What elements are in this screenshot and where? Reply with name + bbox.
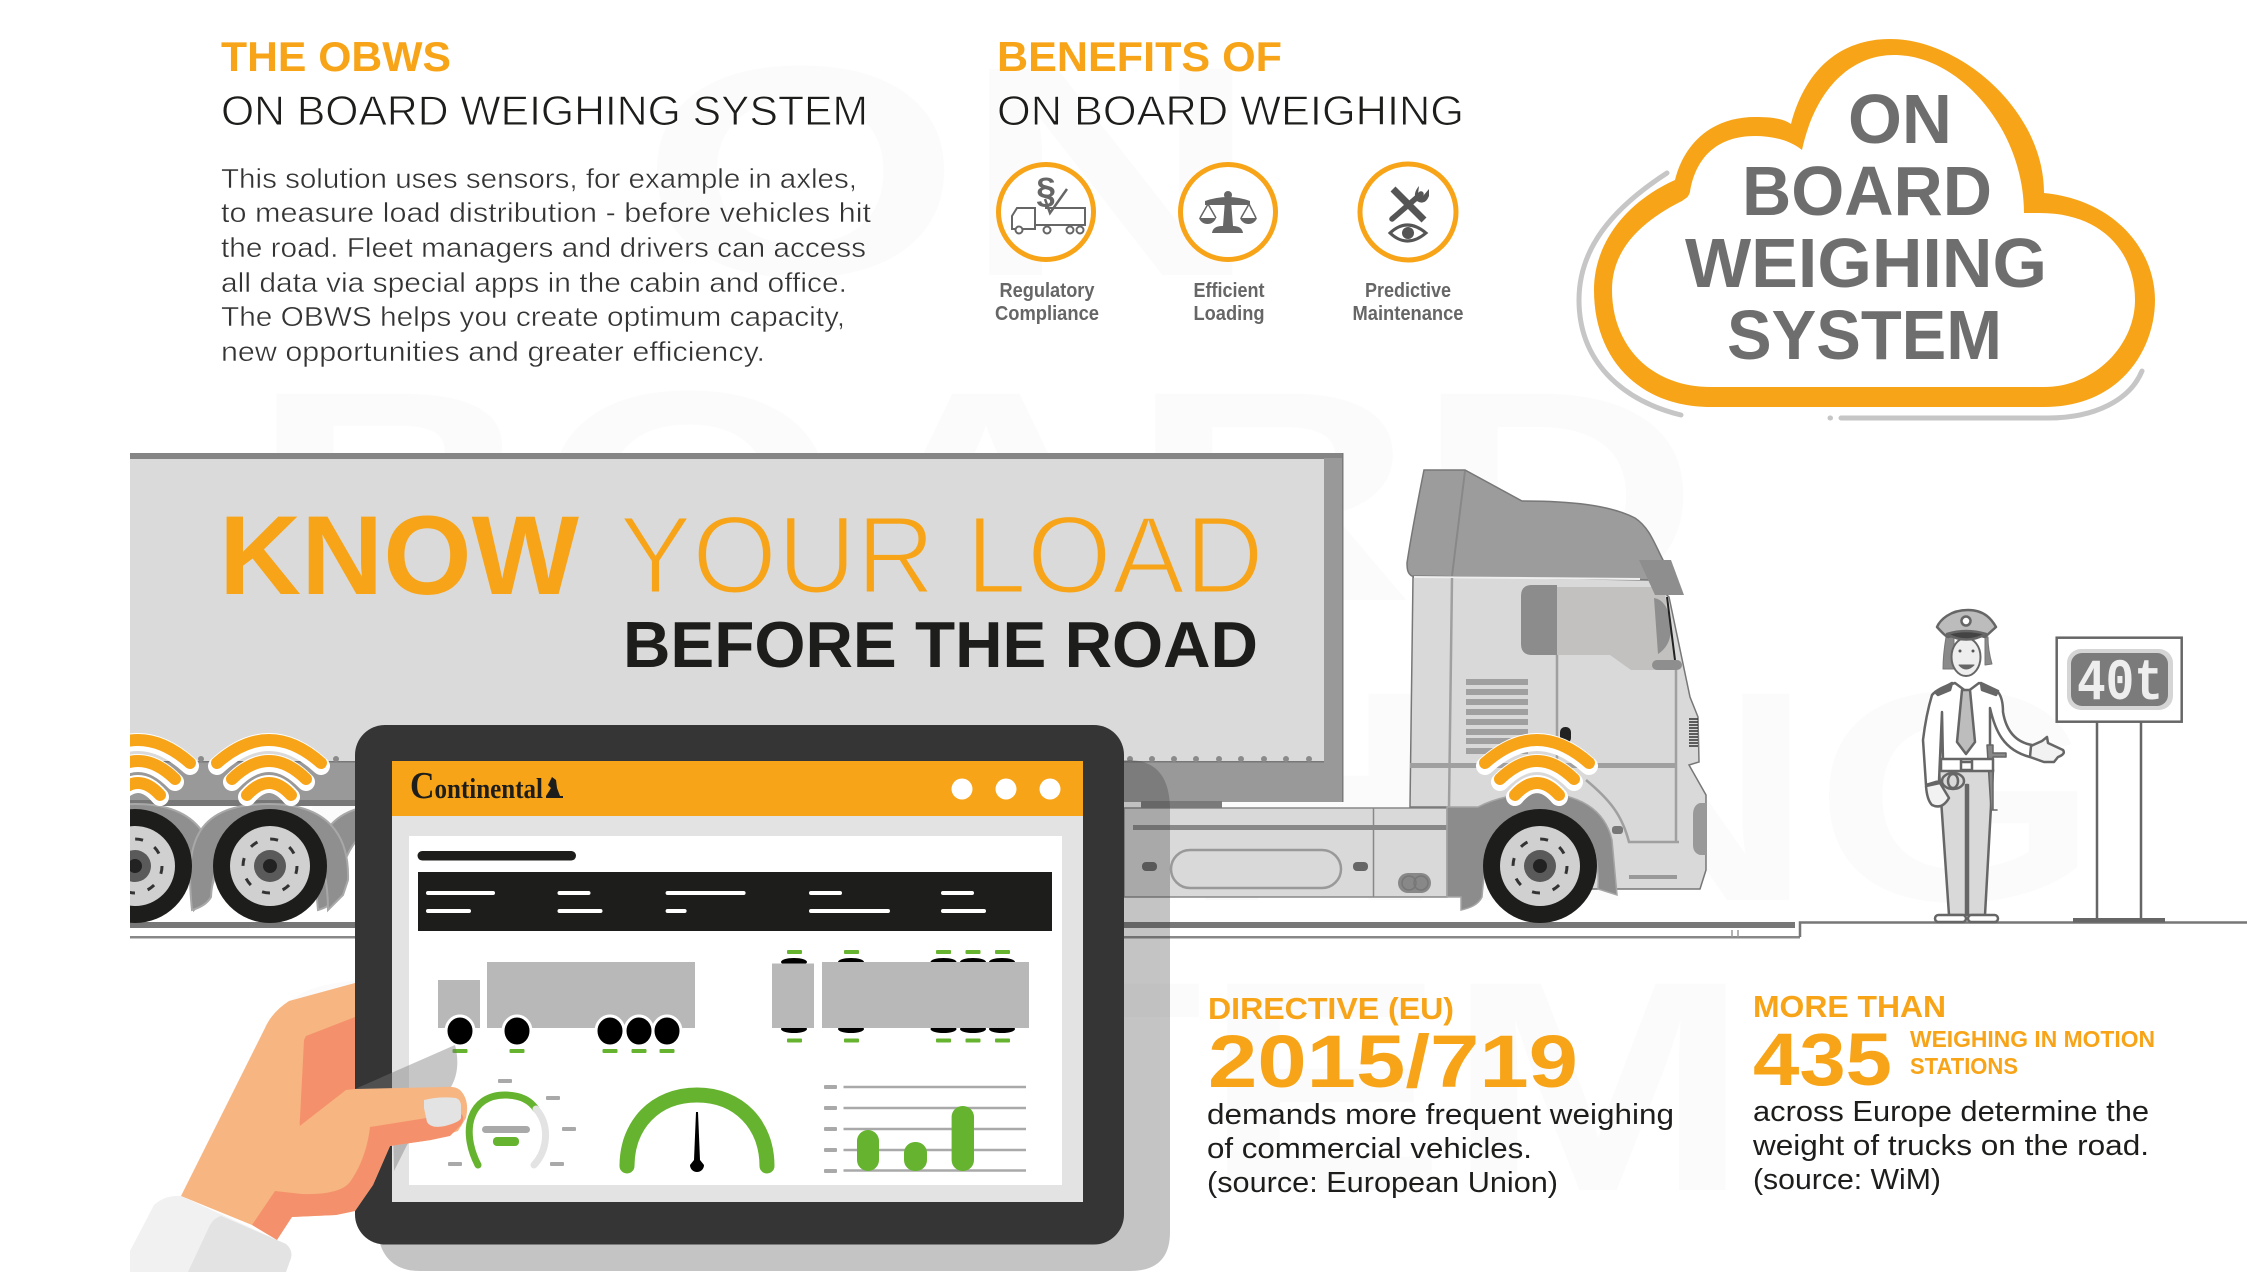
cloud shadow strokes [1579, 173, 2142, 418]
cloud text: ON [1848, 80, 1952, 158]
trailer underframe bar [130, 800, 360, 806]
body paragraph: to measure load distribution - before vehicles hit [221, 197, 871, 228]
truck cab [1124, 470, 1706, 923]
subheading: on board weighing system: ON BOARD WEIGHING SYSTEM [221, 87, 868, 134]
data table [418, 872, 1052, 931]
front wheel [1483, 809, 1597, 923]
dashboard title bar [418, 851, 576, 860]
thumb nail [424, 1097, 461, 1127]
body paragraph [221, 163, 871, 367]
shoes [1935, 915, 1998, 922]
tablet shadow [377, 760, 1170, 1271]
description: across Europe determine the [1753, 1096, 2149, 1128]
label: predictive maintenance [1352, 280, 1464, 325]
label: directive EU: DIRECTIVE (EU) [1208, 991, 1454, 1026]
subheading: on board weighing: ON BOARD WEIGHING [997, 87, 1464, 134]
label: weighing in motion stations: WEIGHING IN MOTION [1910, 1026, 2155, 1052]
cloud text: WEIGHING [1685, 224, 2047, 302]
screen reflection [355, 1045, 457, 1171]
mirrors [1639, 560, 1684, 670]
text block: the OBWS [221, 33, 871, 367]
label: more than: MORE THAN [1753, 989, 1946, 1024]
tablet [355, 725, 1124, 1244]
bar chart [824, 1085, 1026, 1173]
body paragraph: new opportunities and greater efficiency. [221, 336, 765, 367]
cab panel lines [1449, 578, 1679, 842]
sign pole [2073, 722, 2165, 922]
heading: the OBWS: THE OBWS [221, 33, 451, 80]
number: 435: 435 [1753, 1018, 1892, 1101]
text block: weighing stations [1752, 989, 2155, 1196]
police officer [1923, 610, 2064, 922]
dashboard panel [409, 836, 1062, 1185]
door handle [1560, 727, 1571, 743]
label: predictive maintenance: Predictive [1365, 280, 1451, 302]
label: weighing in motion stations: STATIONS [1910, 1053, 2018, 1079]
tablet screen [392, 761, 1083, 1202]
description: (source: European Union) [1207, 1167, 1558, 1199]
palm [181, 983, 467, 1225]
continental logo: Continental [410, 765, 543, 807]
trailer curtain studs [198, 756, 1312, 762]
heading: benefits of: BENEFITS OF [997, 33, 1282, 80]
description: (source: WiM) [1753, 1164, 1941, 1196]
pointing hand [2030, 737, 2064, 762]
label: predictive maintenance: Maintenance [1352, 303, 1464, 325]
cloud badge [1579, 39, 2155, 418]
sign panel [2057, 638, 2182, 722]
text block: directive [1207, 991, 1674, 1199]
road [130, 922, 2247, 938]
large gauge [627, 1095, 767, 1172]
hand holding tablet [130, 983, 467, 1272]
panel: benefits of on board weighing [995, 33, 1464, 325]
cloud text: SYSTEM [1727, 296, 2002, 374]
headline: before the road: BEFORE THE ROAD [623, 608, 1258, 681]
label: efficient loading: Efficient [1194, 280, 1265, 302]
face [1952, 638, 1980, 676]
truck trailer [130, 453, 1344, 806]
icon: regulatory compliance [998, 164, 1094, 260]
cloud outline [1594, 39, 2155, 407]
label: regulatory compliance: Regulatory [1000, 280, 1095, 302]
front wheel sensor waves [1485, 740, 1589, 797]
belt loops [1942, 773, 1964, 789]
trailer box [130, 453, 1343, 802]
headline: know your load: YOUR LOAD [619, 494, 1264, 617]
weight sign [2057, 638, 2182, 922]
background watermark lettering: BOARD [250, 328, 1700, 664]
body paragraph: The OBWS helps you create optimum capacity, [221, 301, 845, 332]
background watermark lettering: ON [640, 3, 1260, 339]
icon: efficient loading scales [1180, 164, 1276, 260]
rear wheels and sensors [130, 733, 355, 923]
tablet body [355, 725, 1124, 1244]
icon: predictive maintenance tools and eye [1360, 164, 1456, 260]
cap [1937, 610, 1996, 637]
app header bar [392, 761, 1083, 816]
body paragraph: the road. Fleet managers and drivers can access [221, 232, 866, 263]
label: efficient loading: Loading [1194, 303, 1264, 325]
cloud text: BOARD [1742, 152, 1992, 230]
roof deflector [1407, 470, 1663, 580]
front grille [1689, 719, 1698, 746]
body paragraph: all data via special apps in the cabin and office. [221, 267, 847, 298]
engine vent [1466, 679, 1528, 754]
palm shading [252, 1017, 463, 1240]
holster strap [1987, 745, 2006, 810]
hair [1943, 637, 1992, 669]
sleeve [130, 1196, 291, 1272]
truck side diagram [438, 962, 695, 1053]
body paragraph: This solution uses sensors, for example in axles, [221, 163, 857, 194]
description: demands more frequent weighing [1207, 1099, 1674, 1131]
cloud text [1685, 80, 2047, 374]
window dots [952, 778, 1060, 800]
background watermark lettering: WEIGHING [200, 628, 2100, 964]
label: weighing in motion stations [1910, 1026, 2155, 1079]
background watermark lettering: SYSTEM [250, 918, 1750, 1254]
description [1207, 1099, 1674, 1199]
description [1752, 1096, 2149, 1196]
tie [1957, 690, 1975, 754]
description: of commercial vehicles. [1207, 1133, 1532, 1165]
headline: know your load: KNOW [219, 493, 579, 618]
chassis panel [1124, 801, 1447, 897]
belt [1941, 759, 1993, 771]
trousers [1939, 770, 1993, 915]
shirt and arms [1923, 683, 2032, 785]
description: weight of trucks on the road. [1752, 1130, 2149, 1162]
cab body [1410, 577, 1706, 889]
icon: regulatory compliance: § [1036, 170, 1056, 211]
side window [1521, 585, 1676, 670]
label: regulatory compliance: Compliance [995, 303, 1099, 325]
label: efficient loading [1194, 280, 1265, 325]
number: 2015/719: 2015/719 [1208, 1020, 1578, 1103]
headline: know your load [219, 493, 1264, 618]
left hand [1926, 783, 1949, 806]
front fender [1447, 793, 1617, 910]
sign display: 40t [2077, 652, 2163, 717]
label: regulatory compliance [995, 280, 1099, 325]
small gauge [448, 1079, 576, 1166]
bumper [1612, 803, 1706, 879]
truck top diagram [772, 950, 1029, 1042]
epaulettes [1935, 683, 1998, 695]
